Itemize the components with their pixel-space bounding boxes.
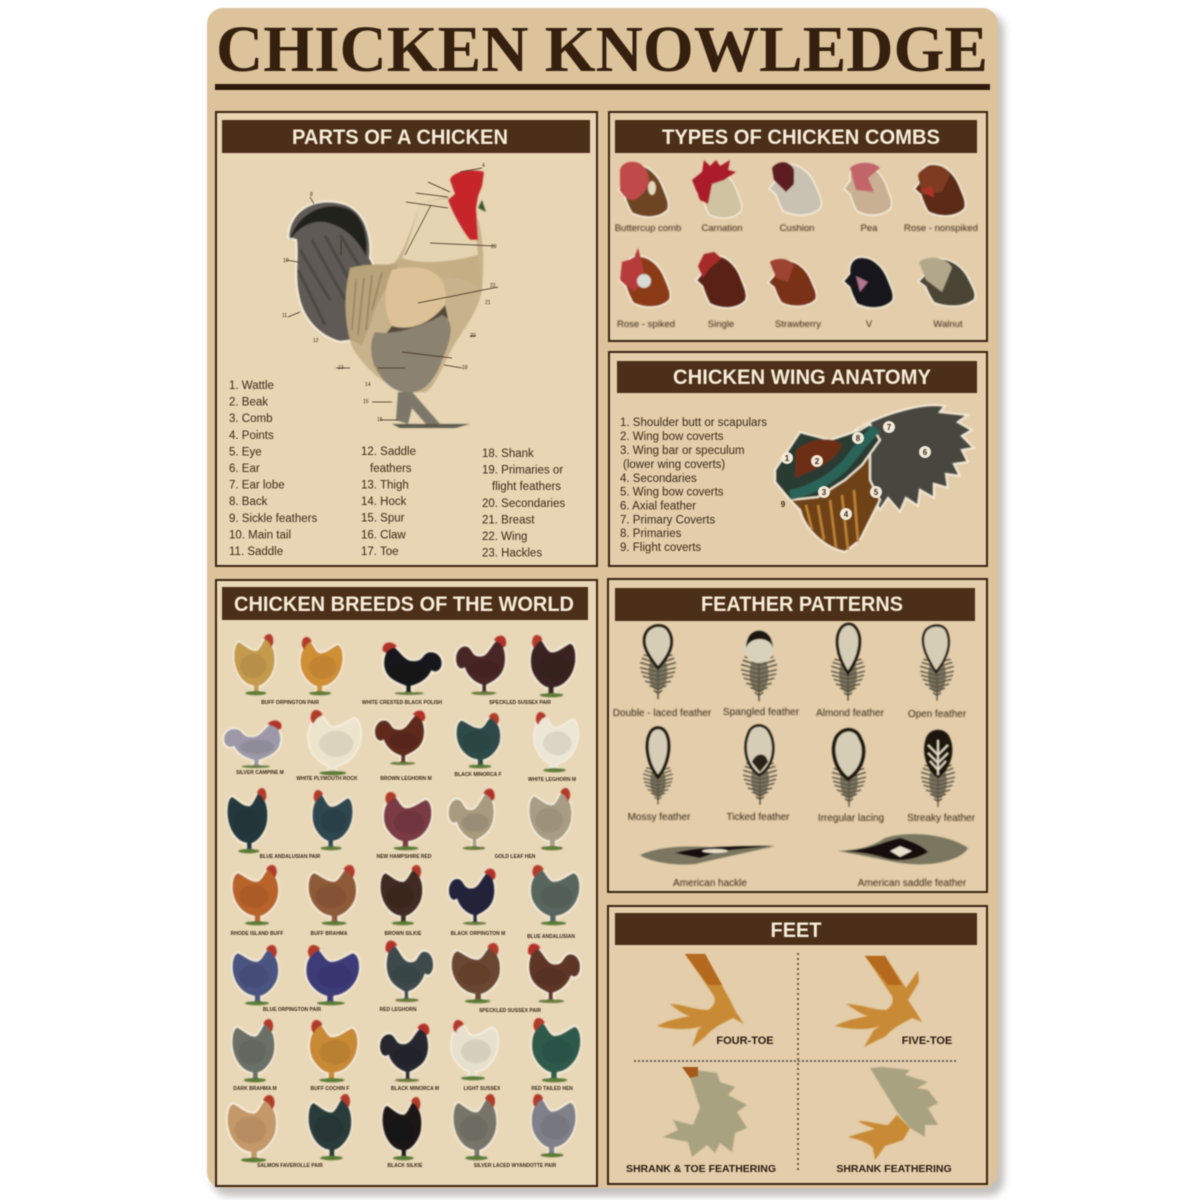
legend column 2: 13. Thigh [361,480,409,492]
breed name labels: LIGHT SUSSEX [464,1086,501,1092]
heading: chicken breeds of the world [222,587,588,620]
foot: shank feathering: SHRANK FEATHERING [836,1163,952,1175]
legend column 2: 14. Hock [361,496,407,508]
wing callout numbers: 2 [815,457,820,466]
rooster leader lines [286,168,498,420]
comb: walnut: Walnut [933,319,963,330]
comb: V: V [866,319,873,330]
comb: walnut [918,258,975,330]
legend column 2: 12. Saddle [361,446,416,458]
legend column 2: 15. Spur [361,513,405,525]
comb: pea: Pea [861,223,878,234]
feather: spangled [723,631,800,718]
legend column 3 [482,448,565,560]
panel: parts of a chicken [216,112,597,566]
rooster callout numbers: 15 [363,399,369,405]
wing legend: (lower wing coverts) [623,459,725,471]
rooster callout numbers: 23 [491,244,497,250]
heading: types of chicken combs [615,120,977,153]
foot: five-toe [835,956,952,1047]
wing callout numbers: 9 [781,500,786,509]
heading: feet: FEET [770,919,822,942]
wing legend: 5. Wing bow coverts [620,486,724,498]
wing callout numbers: 5 [874,488,879,497]
comb: strawberry [768,259,821,330]
rooster callout numbers: 4 [482,163,485,169]
breed name labels: BLACK MINORCA F [454,772,502,778]
comb: buttercup: Buttercup comb [615,223,681,234]
breed illustrations row 1 [234,634,576,697]
legend column 3: 19. Primaries or [482,465,563,477]
legend column 3: 23. Hackles [482,548,542,560]
heading: feet [615,913,977,945]
wing legend: 4. Secondaries [620,473,697,485]
rooster callout numbers: 12 [313,338,319,344]
wing legend: 2. Wing bow coverts [620,431,724,443]
legend column 3: 20. Secondaries [482,498,565,510]
title: CHICKEN KNOWLEDGE [216,13,988,86]
comb: cushion: Cushion [780,223,814,234]
feather: ticked: Ticked feather [726,812,790,823]
breed name labels: WHITE PLYMOUTH ROCK [296,776,358,782]
feather: american saddle [838,834,968,889]
heading: parts of a chicken [222,120,590,153]
rooster callout numbers: 21 [485,300,491,306]
legend column 1: 7. Ear lobe [229,480,285,492]
feather: double laced: Double - laced feather [613,708,712,719]
rooster callout numbers: 22 [490,283,496,289]
feather: american hackle [640,846,775,889]
legend column 3: flight feathers [492,481,561,493]
panel: feet [608,906,987,1184]
wing legend: 8. Primaries [620,528,682,540]
wing callout numbers [781,421,931,520]
wing callout numbers: 7 [887,423,892,432]
panel: feather patterns [608,579,987,892]
foot: four-toe [657,954,774,1047]
legend column 2: feathers [370,463,412,475]
comb: single [696,252,747,330]
comb: buttercup [615,162,681,234]
quadrant divider vertical [797,953,799,1170]
breed name labels: BLACK MINORCA M [391,1086,439,1092]
breed illustrations row 4 [232,865,580,925]
feather: american hackle: American hackle [673,878,747,889]
legend column 1: 8. Back [229,496,268,508]
rooster callout numbers [282,163,497,423]
feather: almond [816,624,885,719]
rooster callout numbers: 18 [462,365,468,371]
breed name labels: BLUE ORPINGTON PAIR [263,1007,321,1013]
quadrant divider horizontal [634,1060,958,1062]
title underline [215,84,990,90]
breed name labels: BLACK ORPINGTON M [451,931,505,937]
feather: ticked [726,726,790,823]
breed name labels: SPECKLED SUSSEX PAIR [479,1008,541,1014]
breed name labels: GOLD LEAF HEN [495,854,536,860]
breed name labels: BUFF ORPINGTON PAIR [261,700,319,706]
comb: rose non-spiked: Rose - nonspiked [904,223,978,234]
breed name labels [231,700,576,1169]
wing legend: 7. Primary Coverts [620,514,715,526]
legend column 2: 17. Toe [361,546,399,558]
comb: carnation [692,160,743,234]
wing legend: 3. Wing bar or speculum [620,445,745,457]
breed illustrations row 3 [227,788,572,853]
wing callout numbers: 3 [822,488,827,497]
heading: parts of a chicken: PARTS OF A CHICKEN [292,126,508,149]
heading: chicken breeds of the world: CHICKEN BREEDS OF THE WORLD [234,593,574,616]
breed name labels: WHITE CRESTED BLACK POLISH [362,700,443,706]
legend column 1: 11. Saddle [229,546,283,558]
feather: irregular lacing: Irregular lacing [818,813,884,824]
heading: chicken wing anatomy: CHICKEN WING ANATOMY [673,366,931,389]
comb: rose spiked [617,248,675,330]
heading: chicken wing anatomy [617,361,977,393]
panel: types of chicken combs [609,112,987,341]
comb: rose spiked: Rose - spiked [617,319,675,330]
feather: open: Open feather [908,709,967,720]
feather: streaky [907,730,976,824]
breed name labels: NEW HAMPSHIRE RED [376,854,432,860]
comb: V [843,257,894,330]
sign shadow [212,14,1004,1196]
legend column 1 [229,380,317,558]
breed name labels: RED TAILED HEN [531,1086,573,1092]
feather: spangled: Spangled feather [723,707,800,718]
feather: mossy: Mossy feather [628,812,691,823]
wing callout numbers: 4 [844,510,849,519]
rooster callout numbers: 8 [310,192,313,198]
breed illustrations row 7 [227,1094,576,1162]
breed name labels: BUFF COCHIN F [311,1086,349,1092]
breed name labels: RHODE ISLAND BUFF [231,931,283,937]
heading: feather patterns [615,588,975,621]
wing callout numbers: 1 [785,454,790,463]
feather: mossy [628,728,691,823]
legend column 1: 9. Sickle feathers [229,513,317,525]
wing legend: 1. Shoulder butt or scapulars [620,417,767,429]
breed name labels: BLUE ANDALUSIAN [527,934,575,940]
legend column 1: 5. Eye [229,446,262,458]
legend column 1: 3. Comb [229,413,272,425]
breed name labels: SALMON FAVEROLLE PAIR [257,1163,323,1169]
legend column 2: 16. Claw [361,529,406,541]
breed name labels: DARK BRAHMA M [233,1086,277,1092]
foot: shank and toe feathering: SHRANK & TOE FEATHERING [626,1163,776,1175]
breed name labels: BUFF BRAHMA [311,931,348,937]
wing illustration [775,405,974,552]
rooster callout numbers: 16 [377,417,383,423]
breed name labels: SILVER CAMPINE M [236,770,284,776]
comb: carnation: Carnation [701,223,743,234]
comb: single: Single [708,319,734,330]
legend column 3: 22. Wing [482,531,527,543]
rooster callout numbers: 14 [365,382,371,388]
foot: four-toe: FOUR-TOE [716,1035,774,1047]
breed name labels: WHITE LEGHORN M [528,777,576,783]
breed name labels: BROWN SILKIE [385,931,422,937]
heading: feather patterns: FEATHER PATTERNS [701,593,903,616]
wing callout numbers: 8 [856,434,861,443]
illustration: rooster [288,170,486,428]
panel: chicken wing anatomy [609,352,987,566]
comb: cushion [769,162,822,234]
legend column 3: 21. Breast [482,514,535,526]
comb: rose non-spiked [904,164,978,234]
feather: open [908,626,967,720]
legend column 1: 6. Ear [229,463,260,475]
sign background [207,8,998,1188]
feather: american saddle: American saddle feather [858,878,967,889]
comb: pea [844,163,892,234]
legend column 1: 10. Main tail [229,529,291,541]
legend column 1: 1. Wattle [229,380,274,392]
wing legend: 6. Axial feather [620,500,696,512]
breed illustrations row 2 [223,710,578,775]
feather: double laced [613,626,712,719]
rooster callout numbers: 11 [282,313,287,319]
feather: almond: Almond feather [816,708,885,719]
breed name labels: SILVER LACED WYANDOTTE PAIR [474,1163,557,1169]
feather: irregular lacing [818,730,884,824]
heading: types of chicken combs: TYPES OF CHICKEN COMBS [662,126,940,149]
wing legend [620,417,767,554]
legend column 1: 2. Beak [229,397,268,409]
breed illustrations row 6 [232,1018,581,1082]
comb: strawberry: Strawberry [775,319,821,330]
foot: shank and toe feathering [626,1067,776,1175]
breed name labels: RED LEGHORN [380,1007,417,1013]
legend column 2 [361,446,416,558]
rooster callout numbers: 13 [338,365,344,371]
breed name labels: BLUE ANDALUSIAN PAIR [260,854,321,860]
breed name labels: SPECKLED SUSSEX PAIR [489,700,551,706]
rooster callout numbers: 20 [470,333,476,339]
rooster callout numbers: 10 [283,258,289,264]
breed name labels: BLACK SILKIE [388,1163,423,1169]
breed name labels: BROWN LEGHORN M [380,776,432,782]
legend column 1: 4. Points [229,430,274,442]
wing legend: 9. Flight coverts [620,542,701,554]
foot: five-toe: FIVE-TOE [902,1035,952,1047]
wing callout numbers: 6 [923,448,928,457]
legend column 3: 18. Shank [482,448,534,460]
foot: shank feathering [836,1067,952,1175]
breed illustrations row 5 [232,941,581,1005]
panel: chicken breeds of the world [216,580,597,1186]
feather: streaky: Streaky feather [907,813,976,824]
